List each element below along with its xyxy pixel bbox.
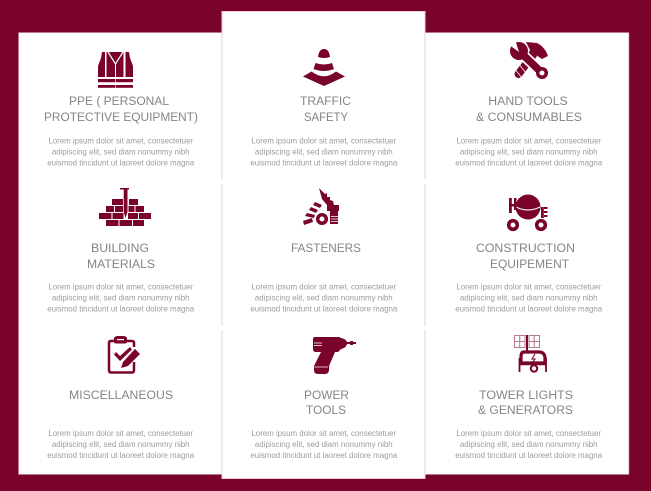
text block: adipiscing elit, sed diam nonummy nibh bbox=[460, 148, 598, 156]
text block: adipiscing elit, sed diam nonummy nibh bbox=[52, 440, 190, 449]
text block: euismod tincidunt ut laoreet dolore magna bbox=[47, 451, 195, 460]
text block: euismod tincidunt ut laoreet dolore magna bbox=[455, 158, 603, 168]
cell: hand tools: & CONSUMABLES bbox=[476, 110, 582, 124]
icon: safety vest bbox=[98, 52, 133, 88]
heading: MISCELLANEOUS bbox=[69, 388, 173, 402]
cell: fasteners bbox=[250, 188, 398, 314]
text block bbox=[250, 282, 398, 314]
icon: tower light generator bbox=[514, 335, 546, 372]
cell: building materials bbox=[47, 188, 195, 314]
text block: Lorem ipsum dolor sit amet, consectetuer bbox=[456, 282, 601, 292]
cell: traffic safety bbox=[250, 49, 398, 168]
text block: Lorem ipsum dolor sit amet, consectetuer bbox=[48, 282, 193, 292]
icon: power drill bbox=[313, 337, 356, 374]
icon: clipboard with pencil bbox=[109, 336, 140, 372]
text block bbox=[455, 136, 603, 168]
text block bbox=[250, 136, 398, 168]
text block: Lorem ipsum dolor sit amet, consectetuer bbox=[456, 429, 601, 438]
text block: euismod tincidunt ut laoreet dolore magna bbox=[250, 451, 398, 460]
cell: PPE: PROTECTIVE EQUIPMENT) bbox=[44, 110, 198, 124]
text block bbox=[47, 282, 195, 314]
heading: TRAFFIC bbox=[300, 94, 351, 108]
panel: raised centre column bbox=[222, 12, 425, 478]
text block: adipiscing elit, sed diam nonummy nibh bbox=[460, 440, 598, 449]
text block: euismod tincidunt ut laoreet dolore magna bbox=[47, 158, 195, 168]
text block: euismod tincidunt ut laoreet dolore magna bbox=[250, 158, 398, 168]
cell: power tools bbox=[250, 337, 398, 460]
heading: POWER bbox=[304, 388, 349, 402]
text block bbox=[47, 136, 195, 168]
text block: adipiscing elit, sed diam nonummy nibh bbox=[52, 148, 190, 156]
text block bbox=[455, 429, 603, 460]
cell: traffic safety: SAFETY bbox=[304, 110, 348, 124]
icon: cement mixer bbox=[509, 194, 548, 229]
heading: PPE ( PERSONAL bbox=[69, 94, 169, 108]
text block: adipiscing elit, sed diam nonummy nibh bbox=[255, 294, 393, 302]
cell: power tools: TOOLS bbox=[306, 403, 346, 417]
text block: euismod tincidunt ut laoreet dolore magna bbox=[47, 304, 195, 314]
cell: building materials: MATERIALS bbox=[87, 257, 155, 271]
text block: Lorem ipsum dolor sit amet, consectetuer bbox=[456, 136, 601, 146]
icon: screw, bolt and nut bbox=[303, 188, 339, 225]
text block: Lorem ipsum dolor sit amet, consectetuer bbox=[251, 282, 397, 292]
text block: euismod tincidunt ut laoreet dolore magna bbox=[250, 304, 398, 314]
text block bbox=[47, 429, 195, 460]
text block: Lorem ipsum dolor sit amet, consectetuer bbox=[251, 136, 397, 146]
text block bbox=[455, 282, 603, 314]
cell: hand tools bbox=[455, 39, 603, 168]
text block: adipiscing elit, sed diam nonummy nibh bbox=[255, 148, 393, 156]
cell: miscellaneous bbox=[47, 336, 195, 460]
cell: PPE bbox=[44, 52, 198, 168]
text block: adipiscing elit, sed diam nonummy nibh bbox=[52, 294, 190, 302]
heading: CONSTRUCTION bbox=[476, 241, 575, 255]
text block: adipiscing elit, sed diam nonummy nibh bbox=[460, 294, 598, 302]
text block: euismod tincidunt ut laoreet dolore magna bbox=[455, 451, 603, 460]
icon: brick wall with nail bbox=[99, 188, 151, 226]
cell: tower lights bbox=[455, 335, 603, 460]
heading: HAND TOOLS bbox=[488, 94, 568, 108]
text block: Lorem ipsum dolor sit amet, consectetuer bbox=[251, 429, 397, 438]
text block bbox=[250, 429, 398, 460]
cell: tower lights: & GENERATORS bbox=[478, 403, 573, 417]
cell: construction equipment bbox=[455, 194, 603, 314]
text block: euismod tincidunt ut laoreet dolore magna bbox=[455, 304, 603, 314]
icon: traffic cone bbox=[303, 49, 345, 86]
text block: adipiscing elit, sed diam nonummy nibh bbox=[255, 440, 393, 449]
cell: construction equipment: EQUIPEMENT bbox=[490, 257, 569, 271]
text block: Lorem ipsum dolor sit amet, consectetuer bbox=[48, 136, 193, 146]
heading: TOWER LIGHTS bbox=[479, 388, 573, 402]
icon: crossed wrench and hammer bbox=[509, 39, 548, 79]
text block: Lorem ipsum dolor sit amet, consectetuer bbox=[48, 429, 193, 438]
heading: FASTENERS bbox=[291, 241, 361, 255]
heading: BUILDING bbox=[91, 241, 149, 255]
